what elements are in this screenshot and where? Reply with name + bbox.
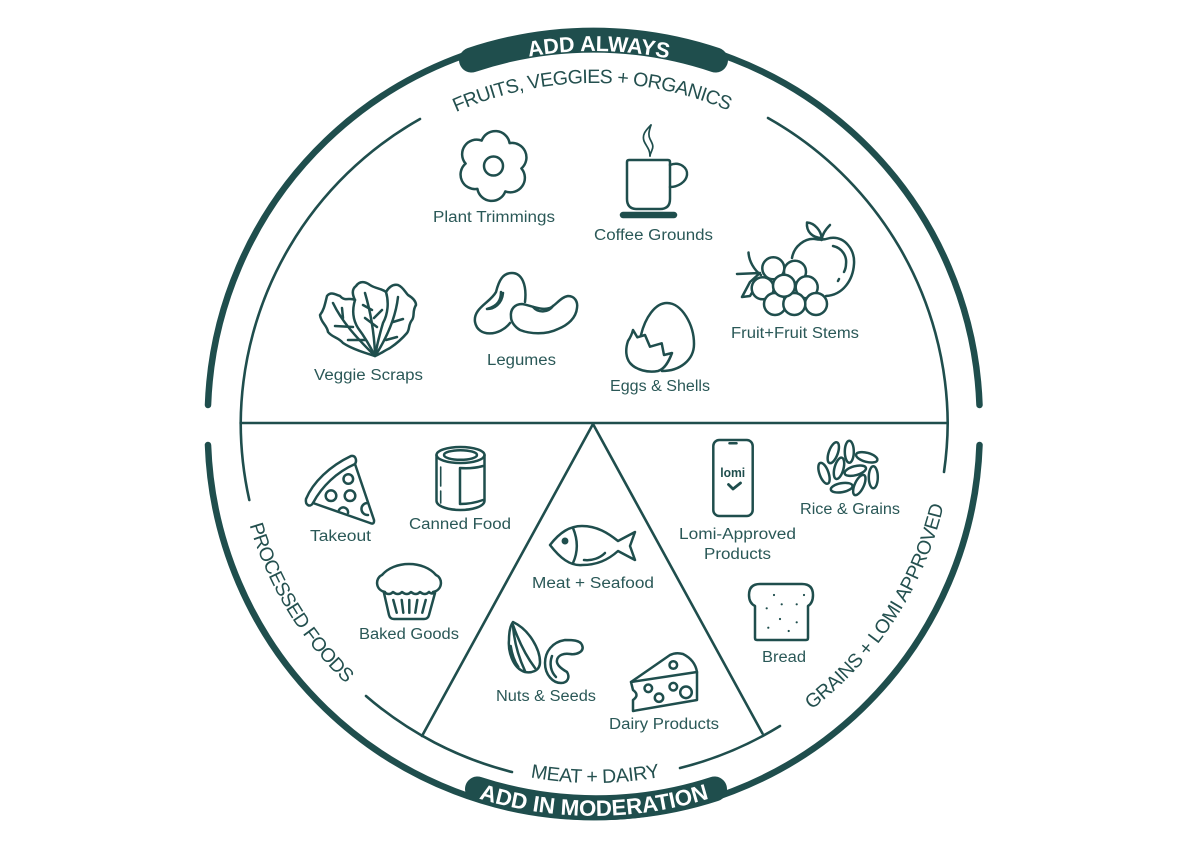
item: nuts and seeds: Nuts & Seeds (496, 688, 596, 705)
icon: muffin (377, 564, 441, 619)
item: takeout: Takeout (310, 528, 372, 545)
item: lomi-approved products (679, 440, 796, 563)
item: plant trimmings: Plant Trimmings (433, 209, 555, 226)
item: legumes: Legumes (487, 352, 556, 369)
banner: add in moderation: ADD IN MODERATION (479, 784, 708, 816)
label: lomi-approved products: Lomi-Approved (679, 526, 796, 543)
icon: flower (461, 131, 526, 201)
icon: apple and grapes (737, 222, 854, 315)
item: rice and grains (800, 441, 900, 518)
icon: lettuce (320, 282, 416, 356)
icon: cheese (631, 653, 697, 711)
banner: add always: ADD ALWAYS (529, 36, 670, 58)
heading: meat + dairy: MEAT + DAIRY (532, 764, 658, 783)
item: veggie scraps (314, 282, 423, 384)
item: nuts and seeds (496, 622, 596, 705)
panel: meat and dairy items (496, 526, 719, 733)
item: fruit and fruit stems: Fruit+Fruit Stems (731, 325, 859, 342)
heading: grains + lomi approved: GRAINS + LOMI APPROVED (806, 504, 942, 707)
label: lomi-approved products (679, 526, 796, 563)
item: legumes (475, 273, 577, 369)
item: coffee grounds: Coffee Grounds (594, 227, 713, 244)
panel: add always items (314, 125, 859, 395)
panel: grains and lomi approved items (679, 440, 900, 666)
item: veggie scraps: Veggie Scraps (314, 367, 423, 384)
item: canned food (409, 447, 511, 533)
item: dairy products (609, 653, 719, 733)
heading: processed foods: PROCESSED FOODS (250, 522, 354, 682)
item: takeout (306, 456, 374, 545)
item: baked goods (359, 564, 459, 643)
icon: cracked egg (626, 303, 694, 372)
panel: processed foods items (306, 447, 511, 643)
item: fruit and fruit stems (731, 222, 859, 342)
icon: fish (550, 526, 635, 565)
item: eggs and shells: Eggs & Shells (610, 378, 710, 395)
icon: rice grains (816, 441, 878, 497)
icon: beans (475, 273, 577, 333)
label: lomi-approved products: Products (704, 546, 771, 563)
outer ring (208, 33, 980, 817)
item: baked goods: Baked Goods (359, 626, 459, 643)
item: meat and seafood (532, 526, 654, 592)
icon: phone with lomi logo: lomi (720, 465, 745, 480)
item: eggs and shells (610, 303, 710, 395)
item: bread: Bread (762, 649, 806, 666)
heading: fruits, veggies + organics: FRUITS, VEGGIES + ORGANICS (452, 70, 732, 112)
icon: coffee cup (621, 125, 687, 217)
icon: can (436, 447, 484, 510)
inner ring and dividers (241, 118, 948, 772)
icon: pizza slice (306, 456, 374, 524)
item: dairy products: Dairy Products (609, 716, 719, 733)
icon: bread slice (749, 584, 813, 640)
banner: add always (459, 28, 728, 72)
item: bread (749, 584, 813, 666)
item: coffee grounds (594, 125, 713, 244)
item: plant trimmings (433, 131, 555, 226)
icon: almond and cashew (509, 622, 583, 683)
item: canned food: Canned Food (409, 516, 511, 533)
item: meat and seafood: Meat + Seafood (532, 575, 654, 592)
item: rice and grains: Rice & Grains (800, 501, 900, 518)
